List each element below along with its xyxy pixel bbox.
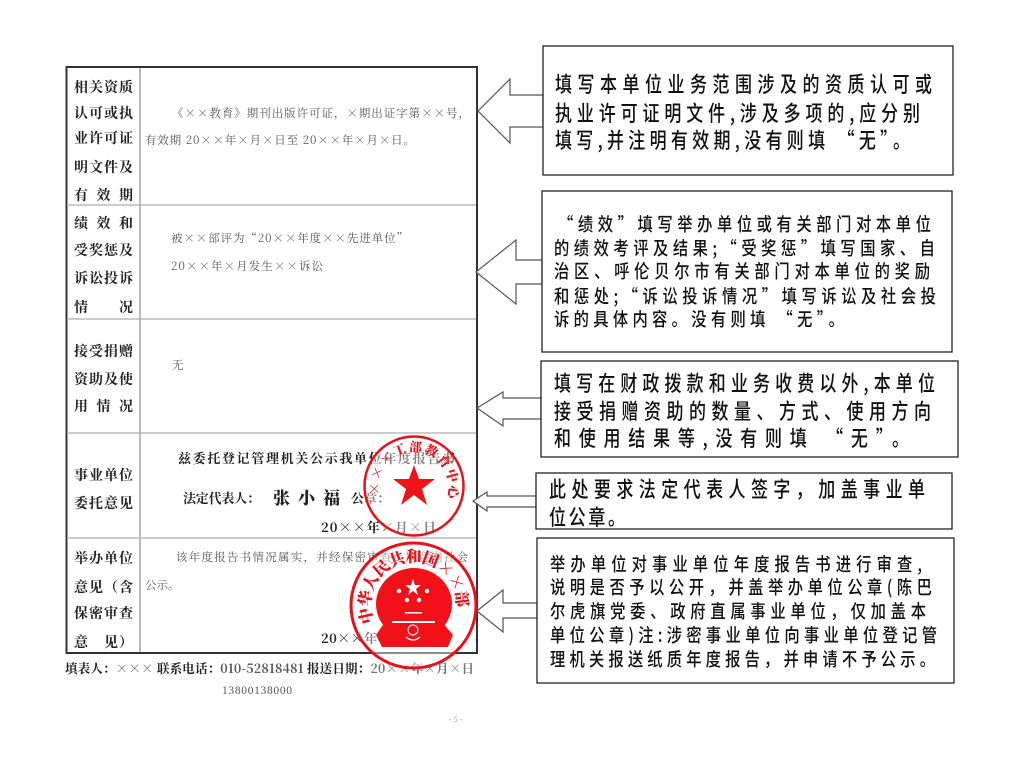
row: performance, awards, litigation: 被××部评为“20××年度××先进单位” (171, 230, 408, 246)
callout 4: signature note: 位公章。 (549, 499, 625, 532)
handwritten signature: 张小福 (273, 484, 340, 509)
footer: filler, phone and date: 填表人：××× 联系电话：010-52818481 报送日期：20××年×月×日 (65, 659, 474, 677)
row: entrusted opinion of the institution: 事业单位 (74, 465, 133, 485)
row: sponsor opinion: 公示。 (145, 577, 180, 593)
callout 5: sponsor note (477, 538, 954, 683)
row: entrusted opinion of the institution: 委托意见 (74, 493, 133, 513)
row: sponsor opinion: 意 见） (74, 632, 133, 652)
callout 1: qualification note: 填写本单位业务范围涉及的资质认可或 (555, 66, 932, 99)
row: donations and funding (74, 341, 184, 416)
seal star (393, 465, 435, 505)
callout 3: donations note: 接受捐赠资助的数量、方式、使用方向 (554, 393, 931, 426)
row: qualification permit documents: 《××教育》期刊出版许可证，×期出证字第××号， (172, 105, 470, 121)
row: donations and funding: 接受捐赠 (74, 341, 133, 361)
arrow (476, 240, 542, 304)
callout 4: signature note: 此处要求法定代表人签字，加盖事业单 (549, 471, 925, 504)
callout 1: qualification note: 填写,并注明有效期,没有则填 “无”。 (555, 122, 910, 155)
callout 2: performance note: 诉的具体内容。没有则填 “无”。 (554, 304, 844, 331)
row: performance, awards, litigation: 情 况 (74, 297, 133, 317)
callout 1: qualification note (478, 46, 953, 175)
row: performance, awards, litigation: 20××年×月发生××诉讼 (171, 258, 324, 274)
footer: filler, phone and date: 13800138000 (222, 685, 292, 697)
row: donations and funding: 用 情 况 (74, 396, 133, 416)
row: entrusted opinion of the institution: 兹委托登记管理机关公示我单位年度报告书 (178, 448, 456, 467)
page number: - 5 - (449, 715, 463, 724)
callout 2: performance note: 治区、呼伦贝尔市有关部门对本单位的奖励 (554, 256, 930, 283)
row: sponsor opinion: 该年度报告书情况属实，并经保密审查，同意向社会 (176, 549, 468, 565)
row: entrusted opinion of the institution: 法定代表人： (183, 488, 260, 507)
row: sponsor opinion: 20××年 (321, 628, 377, 647)
row: performance, awards, litigation: 绩 效 和 (74, 213, 133, 233)
row: donations and funding: 无 (172, 357, 184, 373)
row: qualification permit documents: 明文件及 (74, 157, 133, 177)
arrow (473, 492, 536, 511)
row: sponsor opinion (74, 548, 468, 652)
row: qualification permit documents: 业许可证 (74, 128, 133, 148)
row: performance, awards, litigation (74, 213, 408, 317)
row: qualification permit documents: 有 效 期 (74, 185, 133, 205)
callout 3: donations note: 填写在财政拨款和业务收费以外,本单位 (554, 365, 935, 398)
arrow (478, 79, 543, 143)
stamp: institution seal with star (363, 435, 465, 537)
row: sponsor opinion: 举办单位 (74, 548, 133, 568)
row: sponsor opinion: 保密审查 (74, 603, 133, 623)
row: qualification permit documents: 相关资质 (74, 77, 133, 97)
row: performance, awards, litigation: 受奖惩及 (74, 240, 133, 260)
callout 3: donations note: 和使用结果等,没有则填 “无”。 (554, 420, 909, 453)
callout 3: donations note (477, 361, 958, 457)
row: entrusted opinion of the institution: 公章： (351, 488, 390, 507)
seal text: ×××工部教育中心 (370, 440, 460, 498)
arrow (477, 392, 541, 426)
seal text: 中华人民共和国××部 (356, 548, 470, 624)
footer: filler, phone and date (65, 659, 474, 697)
row: performance, awards, litigation: 诉讼投诉 (74, 268, 134, 288)
row: entrusted opinion of the institution: 20××年×月×日 (321, 517, 436, 536)
callout 2: performance note: 的绩效考评及结果;“受奖惩”填写国家、自 (554, 233, 935, 260)
row: donations and funding: 资助及使 (74, 369, 133, 389)
callout 2: performance note: 和惩处;“诉讼投诉情况”填写诉讼及社会投 (554, 281, 936, 308)
callout 5: sponsor note: 单位公章)注:涉密事业单位向事业单位登记管 (550, 620, 937, 647)
callout 5: sponsor note: 说明是否予以公开，并盖举办单位公章(陈巴 (550, 572, 932, 599)
row: sponsor opinion: 意见（含 (74, 577, 133, 597)
callout 4: signature note (473, 471, 952, 532)
national emblem (376, 568, 453, 647)
row: qualification permit documents: 认可或执 (74, 103, 133, 123)
row: qualification permit documents: 有效期 20××年×月×日至 20××年×月×日。 (145, 132, 415, 148)
callout 1: qualification note: 执业许可证明文件,涉及多项的,应分别 (555, 95, 920, 128)
row: entrusted opinion of the institution (74, 448, 456, 536)
stamp: national emblem seal (350, 542, 478, 670)
panel: report form table (66, 67, 477, 653)
callout 2: performance note (476, 191, 952, 352)
table frame (66, 67, 477, 653)
callout 2: performance note: “绩效”填写举办单位或有关部门对本单位 (558, 209, 931, 236)
callout 5: sponsor note: 尔虎旗党委、政府直属事业单位，仅加盖本 (550, 596, 926, 623)
callout 5: sponsor note: 理机关报送纸质年度报告，并申请不予公示。 (550, 644, 935, 671)
callout 5: sponsor note: 举办单位对事业单位年度报告书进行审查, (550, 549, 922, 576)
row: qualification permit documents (74, 77, 470, 205)
arrow (477, 590, 537, 632)
